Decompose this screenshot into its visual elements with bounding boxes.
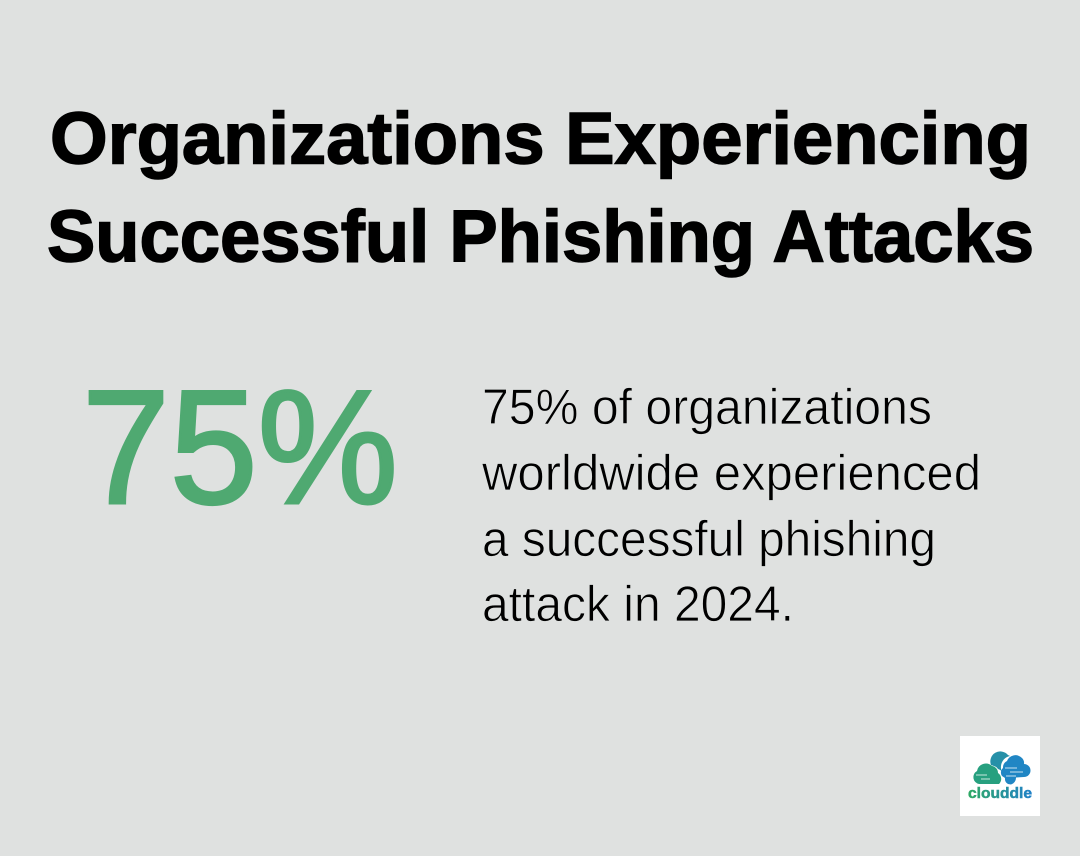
description text: attack in 2024. <box>482 575 794 632</box>
icon: cloud circuit lines <box>976 768 1023 779</box>
big stat: 75%: 75% <box>82 357 398 538</box>
description text <box>481 378 981 632</box>
logo: clouddle <box>960 736 1040 816</box>
icon: middle cloud arc <box>990 751 1010 773</box>
title <box>47 98 1034 278</box>
description text: a successful phishing <box>482 510 936 567</box>
description text: 75% of organizations <box>482 378 932 435</box>
title: Organizations Experiencing <box>50 98 1031 180</box>
icon: left cloud <box>973 764 1001 784</box>
icon: right cloud <box>1001 755 1030 784</box>
description text: worldwide experienced <box>481 444 981 501</box>
logo wordmark: clouddle <box>968 785 1032 802</box>
title: Successful Phishing Attacks <box>47 196 1034 278</box>
